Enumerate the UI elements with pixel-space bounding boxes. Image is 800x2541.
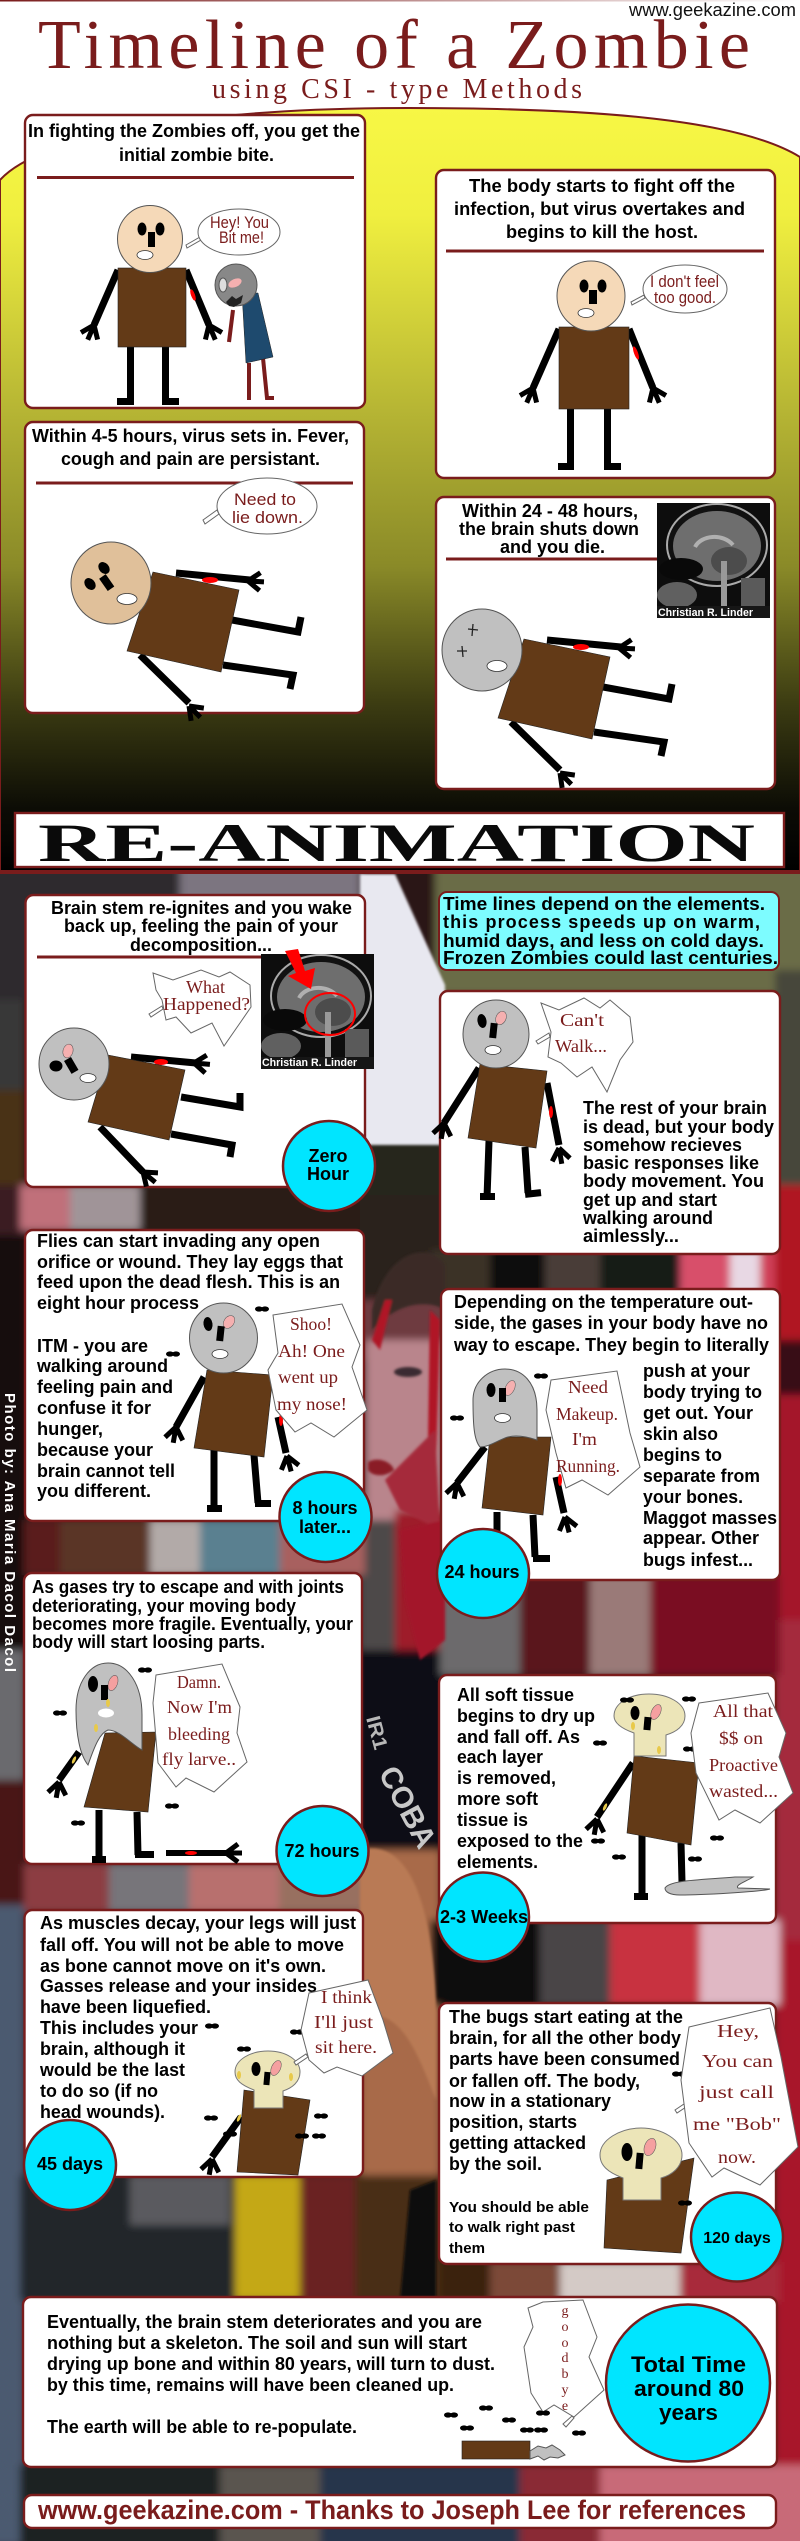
panel text: Gasses release and your insides bbox=[40, 1976, 317, 1996]
timeline marker: 8 hours bbox=[292, 1498, 358, 1518]
figure: zombie biter bbox=[215, 264, 274, 400]
panel text: head wounds). bbox=[40, 2102, 165, 2122]
panel text bbox=[51, 898, 352, 955]
panel text: aimlessly... bbox=[583, 1226, 679, 1246]
panel text bbox=[459, 501, 639, 557]
panel text bbox=[453, 1292, 777, 1570]
panel text: Brain stem re-ignites and you wake bbox=[51, 898, 352, 918]
spiky speech bubble: Can't bbox=[560, 1010, 604, 1030]
panel: bugs eat brain bbox=[439, 2003, 798, 2282]
panel text: As muscles decay, your legs will just bbox=[40, 1913, 356, 1933]
band under zero hour bbox=[20, 1185, 70, 1230]
panel text: As gases try to escape and with joints bbox=[32, 1577, 344, 1597]
panel text: or fallen off. The body, bbox=[449, 2071, 640, 2091]
figure: sitting skull bbox=[200, 2023, 328, 2176]
panel: brain shuts down bbox=[436, 497, 775, 791]
hair over tan bbox=[360, 1849, 436, 2100]
spiky speech bubble: my nose! bbox=[277, 1394, 347, 1414]
panel text: eight hour process bbox=[37, 1293, 199, 1313]
spiky speech bubble: Makeup. bbox=[556, 1404, 618, 1424]
panel: zero hour bbox=[26, 895, 375, 1211]
icon: fallen arm bbox=[166, 1844, 242, 1862]
panel text: and fall off. As bbox=[457, 1727, 580, 1747]
panel: virus sets in bbox=[25, 422, 364, 724]
top area bbox=[0, 874, 177, 1001]
panel: gases bbox=[437, 1289, 780, 1618]
brain scan image with arrow: Christian R. Linder bbox=[262, 1057, 358, 1069]
spiky speech bubble: wasted... bbox=[709, 1781, 778, 1801]
panel text: walking around bbox=[582, 1208, 713, 1228]
spiky speech bubble: bleeding bbox=[168, 1724, 230, 1744]
spiky speech bubble: Shoo! bbox=[290, 1314, 332, 1334]
panel text: getting attacked bbox=[449, 2133, 586, 2153]
figure: decaying zombie bbox=[47, 1663, 179, 1863]
panel text: body trying to bbox=[643, 1382, 762, 1402]
spiky speech bubble bbox=[268, 1304, 367, 1437]
spiky speech bubble: Ah! One bbox=[278, 1341, 345, 1361]
spiky speech bubble: Now I'm bbox=[167, 1697, 232, 1717]
spiky speech bubble bbox=[675, 2008, 798, 2185]
panel text: you different. bbox=[37, 1481, 151, 1501]
spiky speech bubble bbox=[524, 2300, 604, 2427]
panel text: and you die. bbox=[500, 537, 605, 557]
panel text: Eventually, the brain stem deteriorates and you are bbox=[47, 2312, 482, 2332]
photo credit: Photo by: Ana Maria Dacol Dacol bbox=[1, 1393, 18, 1672]
total time marker: Total Time bbox=[631, 2352, 746, 2377]
spiky speech bubble: You can bbox=[702, 2051, 773, 2071]
panel text: back up, feeling the pain of your bbox=[64, 916, 338, 936]
speech bubble: Need to bbox=[234, 490, 296, 509]
timeline marker: 72 hours bbox=[284, 1841, 360, 1861]
panel text: This includes your bbox=[40, 2018, 198, 2038]
bottom band bbox=[20, 2465, 220, 2541]
panel text: the brain shuts down bbox=[459, 519, 639, 539]
panel text: to walk right past bbox=[449, 2219, 575, 2236]
panel text: position, starts bbox=[449, 2112, 577, 2132]
panel text: begins to kill the host. bbox=[506, 222, 698, 242]
panel text bbox=[28, 121, 360, 165]
panel: skeleton ending bbox=[23, 2297, 777, 2467]
panel text: because your bbox=[37, 1440, 153, 1460]
panel text: somehow recieves bbox=[583, 1135, 742, 1155]
spiky speech bubble: o bbox=[562, 2336, 568, 2351]
figure: infected human bbox=[518, 261, 668, 470]
panel: flies bbox=[25, 1230, 372, 1562]
yellow gradient backdrop bbox=[0, 108, 800, 874]
total time marker bbox=[606, 2304, 770, 2462]
panel text: All soft tissue bbox=[457, 1685, 574, 1705]
note: time lines: this process speeds up on warm, bbox=[443, 912, 760, 932]
speech bubble: Hey! You bbox=[210, 213, 269, 232]
figure: human bbox=[79, 206, 224, 405]
band above all soft tissue bbox=[440, 1575, 520, 1675]
photo background bbox=[0, 860, 800, 2541]
panel: legs fall off bbox=[24, 1910, 393, 2210]
hair and face detail bbox=[372, 1252, 445, 1330]
sky wedge bbox=[360, 874, 445, 1145]
panel text: The rest of your brain bbox=[583, 1098, 767, 1118]
title: Timeline of a Zombie bbox=[38, 7, 750, 84]
band above bugs panel bbox=[430, 1920, 540, 2005]
shirt lettering in photo: IR1 bbox=[361, 1714, 391, 1752]
spiky speech bubble: I'm bbox=[572, 1429, 597, 1449]
spiky speech bubble bbox=[153, 1664, 247, 1792]
total time marker: around 80 bbox=[634, 2376, 744, 2401]
panel text: The bugs start eating at the bbox=[449, 2007, 683, 2027]
panel text: them bbox=[449, 2240, 485, 2257]
panel text: infection, but virus overtakes and bbox=[454, 199, 745, 219]
panel text: as bone cannot move on it's own. bbox=[40, 1956, 326, 1976]
spiky speech bubble bbox=[691, 1693, 793, 1823]
timeline marker: Hour bbox=[307, 1164, 349, 1184]
panel text: basic responses like bbox=[583, 1153, 759, 1173]
spiky speech bubble bbox=[149, 970, 251, 1046]
panel text: brain cannot tell bbox=[37, 1461, 175, 1481]
figure: walking zombie bbox=[432, 1000, 571, 1200]
spiky speech bubble: I think bbox=[321, 1987, 372, 2007]
panel text: You should be able bbox=[449, 2199, 589, 2216]
panel text: fall off. You will not be able to move bbox=[40, 1935, 344, 1955]
panel text bbox=[454, 176, 745, 242]
panel text: initial zombie bite. bbox=[119, 145, 274, 165]
timeline marker bbox=[283, 1121, 375, 1211]
figure: stationary skull bbox=[600, 2071, 694, 2253]
timeline marker bbox=[276, 1806, 368, 1896]
panel text: orifice or wound. They lay eggs that bbox=[37, 1252, 343, 1272]
icon: bugs and remains bbox=[444, 2405, 586, 2460]
spiky speech bubble bbox=[546, 1371, 640, 1495]
panel text: Within 4-5 hours, virus sets in. Fever, bbox=[32, 426, 349, 446]
panel: body fights bbox=[436, 170, 775, 478]
panel text: body movement. You bbox=[583, 1171, 764, 1191]
panel text: The earth will be able to re-populate. bbox=[47, 2417, 357, 2437]
panel: soft tissue bbox=[437, 1675, 793, 1962]
spiky speech bubble: I'll just bbox=[314, 2012, 373, 2032]
shirt lettering in photo bbox=[361, 1714, 442, 1854]
panel text: get out. Your bbox=[643, 1403, 753, 1423]
panel text: separate from bbox=[643, 1466, 760, 1486]
panel text: Within 24 - 48 hours, bbox=[462, 501, 638, 521]
figure: fly-ridden zombie bbox=[164, 1303, 300, 1512]
total time marker: years bbox=[659, 2400, 718, 2425]
panel text: exposed to the bbox=[457, 1831, 583, 1851]
note: time lines: Time lines depend on the elements. bbox=[443, 894, 765, 914]
panel text: bugs infest... bbox=[643, 1550, 753, 1570]
panel text: nothing but a skeleton. The soil and sun will start bbox=[47, 2333, 467, 2353]
panel: walking bbox=[432, 991, 780, 1254]
brain scan image bbox=[657, 503, 770, 619]
figure: lying sick bbox=[71, 542, 301, 724]
panel text: walking around bbox=[36, 1356, 168, 1376]
panel text: brain, although it bbox=[40, 2039, 185, 2059]
panel text: appear. Other bbox=[643, 1528, 759, 1548]
panel: losing parts bbox=[24, 1573, 368, 1896]
spiky speech bubble: now. bbox=[718, 2147, 756, 2167]
timeline marker: 45 days bbox=[37, 2154, 103, 2174]
panel text: have been liquefied. bbox=[40, 1997, 211, 2017]
timeline marker: later... bbox=[299, 1517, 351, 1537]
panel text bbox=[32, 1577, 353, 1652]
panel text: hunger, bbox=[37, 1419, 103, 1439]
panel text: body will start loosing parts. bbox=[32, 1632, 265, 1652]
right gaps bbox=[430, 1250, 490, 1295]
panel text: elements. bbox=[457, 1852, 538, 1872]
panel text: becomes more fragile. Eventually, your bbox=[32, 1614, 353, 1634]
timeline marker bbox=[691, 2192, 783, 2282]
speech bubble bbox=[631, 265, 727, 313]
band under losing parts bbox=[24, 1864, 109, 1912]
timeline marker: 120 days bbox=[703, 2230, 771, 2247]
speech bubble bbox=[203, 478, 317, 534]
panel text bbox=[582, 1098, 774, 1246]
panel text: way to escape. They begin to literally bbox=[453, 1335, 769, 1355]
spiky speech bubble: e bbox=[562, 2399, 568, 2414]
spiky speech bubble: Happened? bbox=[163, 994, 250, 1014]
figure: waking zombie bbox=[39, 1028, 240, 1189]
panel text bbox=[449, 2007, 683, 2257]
spiky speech bubble: sit here. bbox=[315, 2037, 377, 2057]
panel text: side, the gases in your body have no bbox=[454, 1313, 768, 1333]
panel text: more soft bbox=[457, 1789, 538, 1809]
spiky speech bubble: Proactive bbox=[709, 1755, 778, 1775]
spiky speech bubble: went up bbox=[278, 1367, 338, 1387]
panel text: deteriorating, your moving body bbox=[32, 1596, 296, 1616]
timeline marker: 24 hours bbox=[444, 1562, 520, 1582]
banner: re-animation: RE-ANIMATION bbox=[38, 813, 755, 873]
subtitle: using CSI - type Methods bbox=[212, 74, 582, 105]
panel: initial bite bbox=[25, 115, 365, 408]
panel text: by the soil. bbox=[449, 2154, 542, 2174]
spiky speech bubble bbox=[294, 1980, 393, 2076]
speech bubble: too good. bbox=[654, 288, 716, 307]
timeline marker bbox=[437, 1529, 529, 1618]
spiky speech bubble: b bbox=[562, 2367, 568, 2382]
band under flies panel bbox=[24, 1520, 60, 1575]
timeline marker: 2-3 Weeks bbox=[440, 1907, 528, 1927]
panel text: feed upon the dead flesh. This is an bbox=[37, 1272, 340, 1292]
note: time lines: humid days, and less on cold days. bbox=[443, 931, 764, 951]
top line bbox=[0, 0, 800, 2]
footer credits: www.geekazine.com - Thanks to Joseph Lee for references bbox=[37, 2495, 746, 2525]
spiky speech bubble: fly larve.. bbox=[162, 1749, 236, 1769]
panel text: to do so (if no bbox=[40, 2081, 158, 2101]
panel text: Flies can start invading any open bbox=[37, 1231, 320, 1251]
spiky speech bubble: Running. bbox=[556, 1456, 620, 1476]
spiky speech bubble: What bbox=[186, 977, 225, 997]
spiky speech bubble: me "Bob" bbox=[693, 2114, 781, 2134]
panel text: ITM - you are bbox=[37, 1336, 148, 1356]
center strip bbox=[366, 1145, 439, 1195]
panel text: drying up bone and within 80 years, will turn to dust. bbox=[47, 2354, 495, 2374]
panel text: parts have been consumed bbox=[449, 2049, 680, 2069]
timeline marker bbox=[24, 2120, 116, 2210]
panel text: is removed, bbox=[457, 1768, 556, 1788]
figure: melting zombie bbox=[445, 1369, 578, 1562]
panel text: by this time, remains will have been cleaned up. bbox=[47, 2375, 454, 2395]
panel text: Depending on the temperature out- bbox=[454, 1292, 753, 1312]
panel text: push at your bbox=[643, 1361, 750, 1381]
spiky speech bubble: Need bbox=[568, 1377, 608, 1397]
banner: re-animation bbox=[0, 813, 800, 873]
brain scan image: Christian R. Linder bbox=[658, 607, 754, 619]
panel text bbox=[457, 1685, 595, 1872]
panel text bbox=[36, 1231, 343, 1501]
panel text: decomposition... bbox=[130, 935, 272, 955]
panel text: begins to dry up bbox=[457, 1706, 595, 1726]
panel text: begins to bbox=[643, 1445, 722, 1465]
panel text: skin also bbox=[643, 1424, 718, 1444]
speech bubble: Bit me! bbox=[219, 228, 264, 247]
shirt lettering in photo: COBA bbox=[372, 1761, 442, 1854]
spiky speech bubble: Damn. bbox=[177, 1672, 221, 1692]
panel text: cough and pain are persistant. bbox=[61, 449, 320, 469]
band under legs panel bbox=[20, 2175, 235, 2300]
panel text: is dead, but your body bbox=[583, 1117, 774, 1137]
panel text: each layer bbox=[457, 1747, 543, 1767]
note: time lines bbox=[439, 892, 779, 970]
timeline marker bbox=[437, 1872, 529, 1962]
brain scan image with arrow bbox=[261, 949, 374, 1069]
panel text: confuse it for bbox=[37, 1398, 151, 1418]
panel text: In fighting the Zombies off, you get the bbox=[28, 121, 360, 141]
panel text: feeling pain and bbox=[37, 1377, 173, 1397]
panel text bbox=[32, 426, 349, 469]
timeline marker bbox=[280, 1472, 372, 1562]
panel text: Maggot masses bbox=[643, 1508, 777, 1528]
panel text: brain, for all the other body bbox=[449, 2028, 681, 2048]
panel text: tissue is bbox=[457, 1810, 528, 1830]
speech bubble: lie down. bbox=[232, 508, 303, 527]
spiky speech bubble bbox=[536, 998, 633, 1092]
spiky speech bubble: just call bbox=[698, 2082, 774, 2102]
figure: dead bbox=[442, 609, 672, 791]
note: time lines: Frozen Zombies could last centuries. bbox=[443, 948, 778, 968]
speech bubble bbox=[186, 209, 280, 255]
left strip bbox=[0, 1000, 24, 1090]
icon: fallen flesh bbox=[665, 1877, 770, 1895]
website url: www.geekazine.com bbox=[628, 0, 796, 20]
panel text: The body starts to fight off the bbox=[469, 176, 735, 196]
panel text: get up and start bbox=[583, 1190, 717, 1210]
panel text: now in a stationary bbox=[449, 2091, 611, 2111]
spiky speech bubble: $$ on bbox=[719, 1728, 763, 1748]
spiky speech bubble: d bbox=[562, 2351, 568, 2366]
spiky speech bubble: Walk... bbox=[555, 1036, 607, 1056]
panel text bbox=[39, 1913, 356, 2122]
speech bubble: I don't feel bbox=[650, 272, 719, 291]
spiky speech bubble: y bbox=[562, 2383, 568, 2398]
spiky speech bubble: o bbox=[562, 2320, 568, 2335]
spiky speech bubble: Hey, bbox=[717, 2021, 759, 2041]
panel text bbox=[47, 2312, 495, 2437]
spiky speech bubble: All that bbox=[713, 1701, 773, 1721]
panel text: would be the last bbox=[39, 2060, 185, 2080]
timeline marker: Zero bbox=[308, 1146, 348, 1166]
figure: skull zombie bbox=[585, 1694, 724, 1900]
spiky speech bubble: g bbox=[562, 2304, 568, 2319]
panel text: your bones. bbox=[643, 1487, 743, 1507]
